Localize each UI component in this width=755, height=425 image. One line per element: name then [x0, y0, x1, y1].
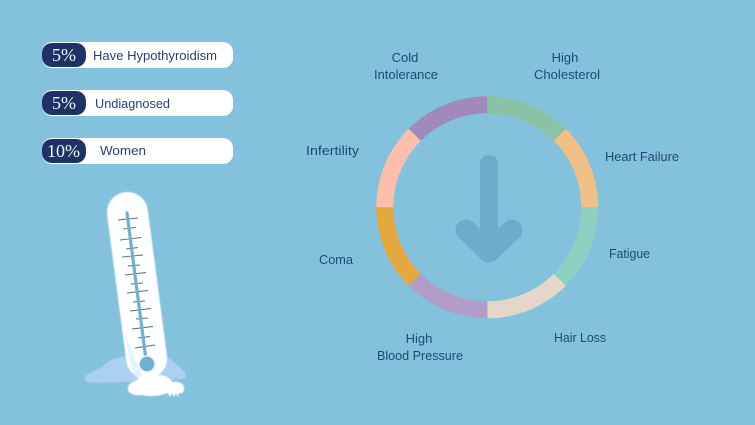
stat pill: 10% women: [42, 138, 233, 164]
label: coma: Coma: [319, 252, 354, 267]
chart: symptom ring: [385, 105, 590, 310]
snow mound: [128, 375, 184, 397]
thermometer mercury: [127, 213, 146, 360]
label: cold intolerance: Intolerance: [374, 67, 438, 82]
stat pill: 5% undiagnosed: Undiagnosed: [95, 96, 170, 111]
label: heart failure: Heart Failure: [605, 149, 679, 164]
thermometer scale ticks: [118, 218, 155, 348]
icon: thermometer melting on ice: [85, 190, 186, 397]
label: fatigue: Fatigue: [609, 246, 650, 261]
label: high blood pressure: Blood Pressure: [377, 348, 463, 363]
stat pill: 5% undiagnosed: 5%: [52, 93, 76, 113]
stat pill: 5% undiagnosed: [42, 90, 233, 116]
label: cold intolerance: Cold: [392, 50, 418, 65]
ice puddle: [85, 356, 186, 383]
icon: down arrow: [466, 164, 512, 252]
stat pill: 5% have hypothyroidism: Have Hypothyroidism: [93, 48, 217, 63]
stat pill: 5% have hypothyroidism: [42, 42, 233, 68]
label: high blood pressure: High: [406, 331, 432, 346]
stat pill: 10% women: Women: [100, 143, 146, 158]
thermometer body: [104, 190, 170, 381]
stat pill: 10% women: 10%: [47, 141, 80, 161]
label: hair loss: Hair Loss: [554, 330, 606, 345]
label: high cholesterol: Cholesterol: [534, 67, 600, 82]
label: infertility: Infertility: [306, 143, 360, 158]
label: high cholesterol: High: [552, 50, 578, 65]
stat pill: 5% have hypothyroidism: 5%: [52, 45, 76, 65]
